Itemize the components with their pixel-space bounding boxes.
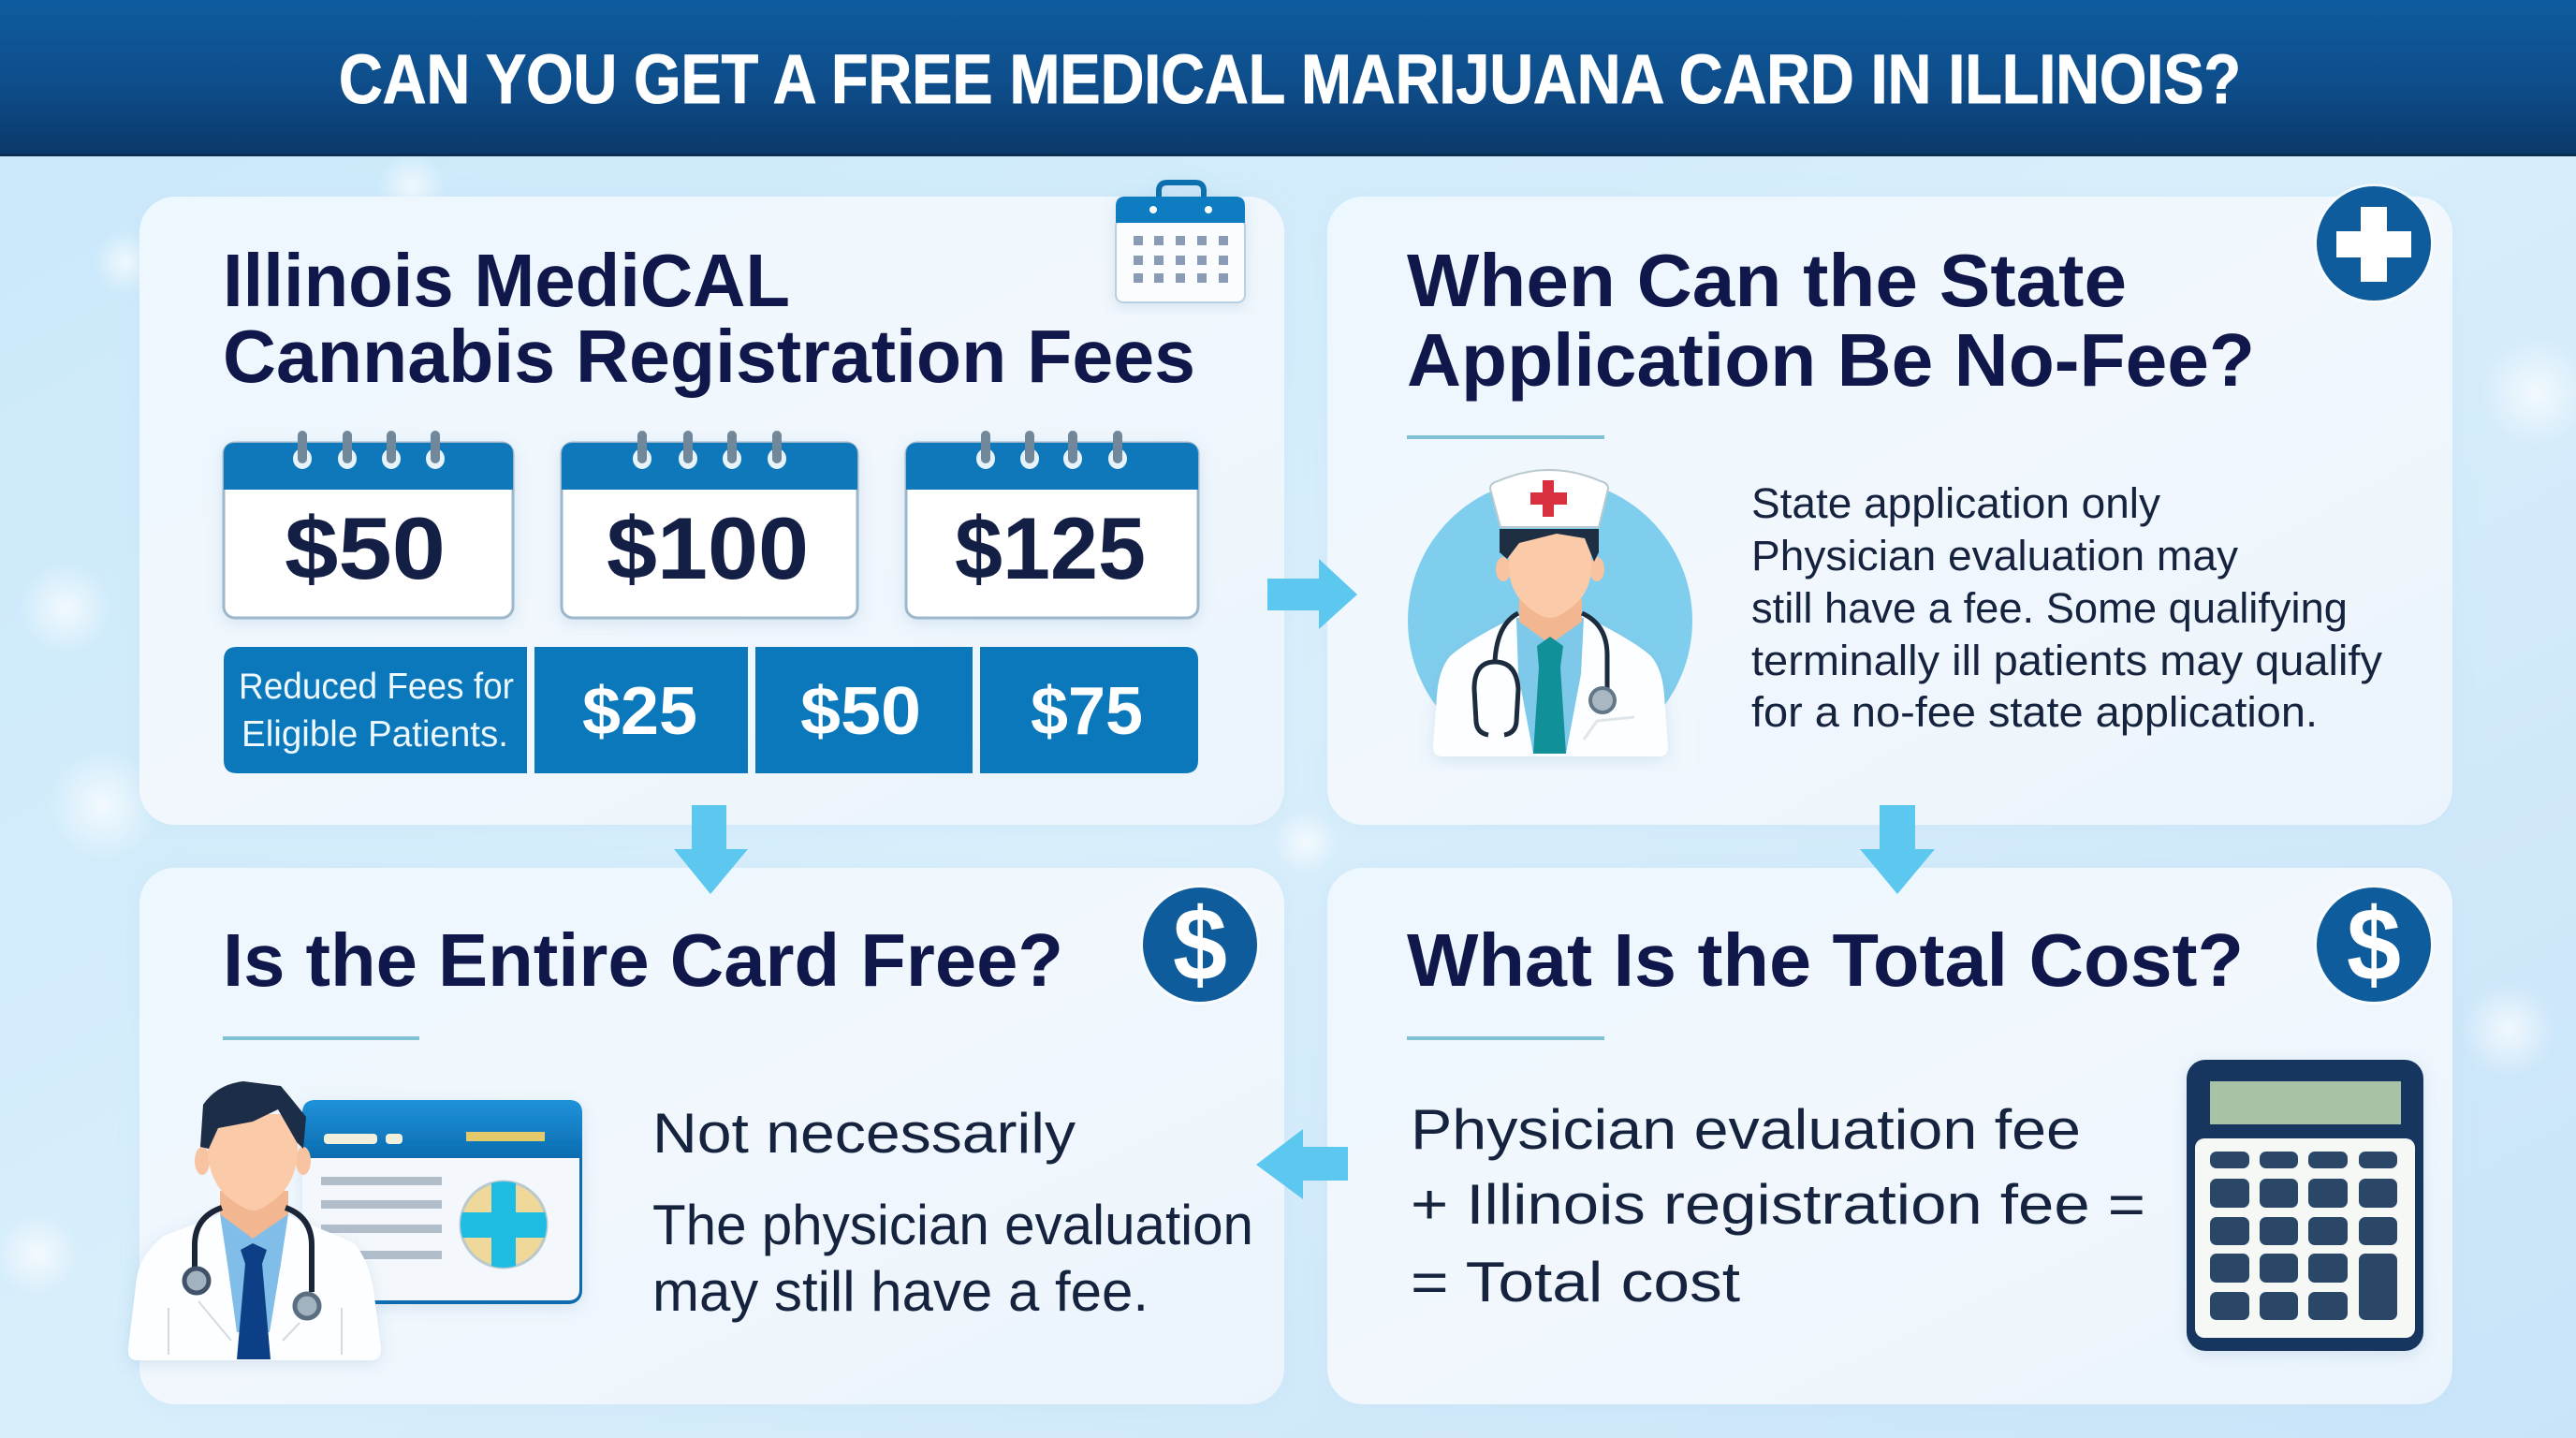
heading: registration fees: Cannabis Registration Fees bbox=[223, 315, 1195, 398]
icon: dollar coin: $ bbox=[2347, 888, 2401, 1003]
reduced fee bar bbox=[224, 647, 1198, 773]
body text: entire card free: The physician evaluation bbox=[652, 1194, 1253, 1256]
fee card: $50 bbox=[224, 431, 513, 618]
title: CAN YOU GET A FREE MEDICAL MARIJUANA CARD IN ILLINOIS? bbox=[339, 40, 2241, 118]
reduced fee label: Eligible Patients. bbox=[242, 714, 508, 755]
icon: dollar coin bbox=[1140, 885, 1260, 1005]
body text: no-fee application bbox=[1751, 479, 2383, 736]
arrow: right bbox=[1267, 559, 1357, 629]
body text: no-fee application: State application only bbox=[1751, 479, 2160, 527]
reduced fee: $50: $50 bbox=[800, 674, 921, 749]
fee card: $125: $125 bbox=[955, 499, 1146, 597]
arrow: down right bbox=[1860, 805, 1935, 894]
body text: entire card free: Not necessarily bbox=[652, 1102, 1076, 1165]
heading: no-fee application: Application Be No-Fee? bbox=[1407, 318, 2255, 402]
heading: no-fee application: When Can the State bbox=[1407, 239, 2127, 322]
body text: total cost: = Total cost bbox=[1411, 1251, 1740, 1313]
body text: no-fee application: for a no-fee state application. bbox=[1751, 688, 2318, 736]
reduced fee: $75: $75 bbox=[1031, 674, 1143, 749]
nurse hat bbox=[1490, 470, 1608, 527]
illustration: nurse doctor bbox=[1404, 470, 1696, 768]
arrow: left bbox=[1256, 1129, 1348, 1199]
fee card: $100: $100 bbox=[607, 499, 809, 597]
icon: medical cross bbox=[2314, 183, 2434, 303]
panel: entire card free bbox=[128, 868, 1284, 1404]
body text: total cost bbox=[1411, 1098, 2145, 1313]
reduced fee label: Reduced Fees for bbox=[239, 667, 514, 707]
icon: dollar coin bbox=[2314, 885, 2434, 1005]
reduced fee: $75 bbox=[980, 647, 1198, 773]
reduced fee: $50 bbox=[755, 647, 973, 773]
heading: registration fees: Illinois MediCAL bbox=[223, 239, 790, 322]
body text: no-fee application: still have a fee. Some qualifying bbox=[1751, 584, 2348, 632]
reduced fee label bbox=[224, 647, 527, 773]
body text: total cost: + Illinois registration fee = bbox=[1411, 1173, 2145, 1236]
body text: no-fee application: Physician evaluation may bbox=[1751, 532, 2238, 580]
illustration: calculator bbox=[2187, 1060, 2423, 1351]
arrow: down left bbox=[674, 805, 748, 894]
body text: entire card free: may still have a fee. bbox=[652, 1260, 1149, 1323]
body text: no-fee application: terminally ill patients may qualify bbox=[1751, 637, 2383, 684]
panel: total cost bbox=[1327, 868, 2452, 1404]
reduced fee: $25 bbox=[534, 647, 748, 773]
fee card: $50: $50 bbox=[285, 499, 446, 597]
icon: dollar coin: $ bbox=[1173, 888, 1227, 1003]
heading: entire card free: Is the Entire Card Free? bbox=[223, 918, 1063, 1002]
reduced fee: $25: $25 bbox=[582, 674, 697, 749]
heading: no-fee application bbox=[1407, 239, 2255, 402]
fee card: $100 bbox=[562, 431, 857, 618]
body text: total cost: Physician evaluation fee bbox=[1411, 1098, 2081, 1161]
illustration: ID card bbox=[302, 1100, 582, 1304]
heading: registration fees bbox=[223, 239, 1195, 398]
heading: total cost: What Is the Total Cost? bbox=[1407, 918, 2244, 1002]
illustration: doctor bbox=[128, 1081, 381, 1360]
fee card: $125 bbox=[906, 431, 1198, 618]
icon: calendar bbox=[1116, 183, 1245, 302]
body text: entire card free bbox=[652, 1102, 1253, 1323]
panel: registration fees bbox=[139, 183, 1284, 825]
header banner bbox=[0, 0, 2576, 156]
panel: no-fee application bbox=[1327, 183, 2452, 825]
